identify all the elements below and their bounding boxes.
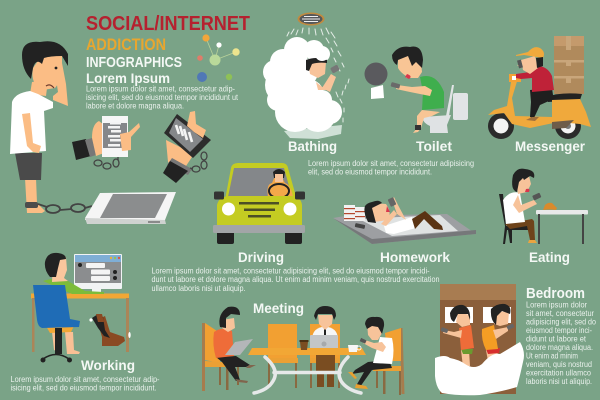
- illustration: meeting at table: [202, 306, 403, 395]
- text block: bedroom: Ut enim ad minim: [526, 352, 578, 360]
- illustration: driving car: [213, 163, 305, 244]
- text block: working: isicing elit, sed do eiusmod tempor incididunt.: [10, 384, 156, 392]
- illustration: addicted man: [10, 41, 68, 213]
- text block: bedroom: Lorem ipsum dolor: [526, 300, 587, 310]
- coffee and mug: [300, 340, 361, 352]
- illustration: eating at table: [499, 169, 588, 244]
- text block: bathing and toilet: [308, 159, 474, 176]
- title: [86, 13, 250, 71]
- person: right in bed: [482, 304, 514, 367]
- heading: toilet: Toilet: [416, 138, 452, 154]
- heading: bathing: Bathing: [288, 138, 337, 154]
- chair: back left: [268, 324, 298, 388]
- illustration: working at computer: [31, 253, 131, 362]
- text block: bedroom: eiusmod tempor inci-: [526, 326, 592, 335]
- icon: toilet roll: [364, 62, 388, 99]
- text block: working: Lorem ipsum dolor sit amet, consectetur adip-: [10, 375, 160, 384]
- title: SOCIAL/INTERNET: [86, 13, 250, 35]
- illustration: bathing: [263, 28, 349, 139]
- illustration: toilet: [390, 47, 468, 133]
- heading: driving: Driving: [238, 249, 284, 265]
- blanket: [435, 342, 524, 395]
- person: left in bed: [440, 305, 474, 367]
- intro text block: Lorem Ipsum: [86, 70, 170, 86]
- illustration: homework on giant phone: [333, 197, 476, 244]
- icon: hand holding phone with handcuff: [72, 116, 140, 169]
- man with phone: [348, 317, 403, 395]
- heading: working: Working: [81, 357, 135, 373]
- text block: driving, homework, eating: ullamco laboris nisi ut aliquip.: [152, 284, 246, 293]
- intro text block: labore et dolore magna aliqua.: [86, 102, 184, 110]
- text block: driving, homework, eating: Lorem ipsum dolor sit amet, consectetur adipisicing elit, sed do eiusmod tempor incidi-: [152, 266, 430, 276]
- illustration: bedroom: [435, 284, 524, 395]
- icon: hand holding tablet with handcuff: [163, 111, 211, 183]
- heading: messenger: Messenger: [515, 138, 586, 154]
- title: INFOGRAPHICS: [86, 54, 182, 71]
- table: [248, 348, 366, 393]
- intro text block: isicing elit, sed do eiusmod tempor incididunt ut: [86, 93, 239, 102]
- text block: bedroom: didunt ut labore et: [526, 334, 587, 344]
- icon: tablet: [85, 192, 176, 224]
- chair and man: center: [310, 306, 340, 388]
- heading: meeting: Meeting: [253, 300, 304, 316]
- text block: driving, homework, eating: dunt ut labore et dolore magna aliqua. Ut enim ad minim veniam, quis nostrud exercitation: [152, 275, 440, 284]
- heading: homework: Homework: [380, 249, 450, 265]
- heading: eating: Eating: [529, 249, 570, 265]
- text block: bedroom: [526, 300, 596, 386]
- title: ADDICTION: [86, 35, 166, 54]
- text block: bathing and toilet: elit, sed do eiusmod tempor incididunt.: [308, 168, 432, 176]
- intro text block: [86, 70, 239, 110]
- icon: chain to tablet: [38, 204, 92, 213]
- text block: working: [10, 375, 160, 392]
- intro text block: Lorem ipsum dolor sit amet, consectetur adip-: [86, 84, 235, 94]
- text block: bedroom: sit amet, consectetur: [526, 309, 594, 318]
- icon: shower head: [298, 12, 324, 26]
- text block: bedroom: exercitation ullamco: [526, 368, 592, 378]
- text block: driving, homework, eating: [152, 266, 440, 293]
- text block: bedroom: laboris nisi ut aliquip.: [526, 377, 592, 386]
- text block: bathing and toilet: Lorem ipsum dolor sit amet, consectetur adipisicing: [308, 159, 474, 168]
- illustration: messenger on scooter: [488, 36, 591, 139]
- icon: network molecule: [197, 34, 240, 82]
- text block: bedroom: dolore magna aliqua.: [526, 343, 593, 352]
- woman with laptop: [202, 307, 256, 391]
- heading: bedroom: Bedroom: [526, 286, 585, 302]
- text block: bedroom: veniam, quis nostrud: [526, 360, 592, 369]
